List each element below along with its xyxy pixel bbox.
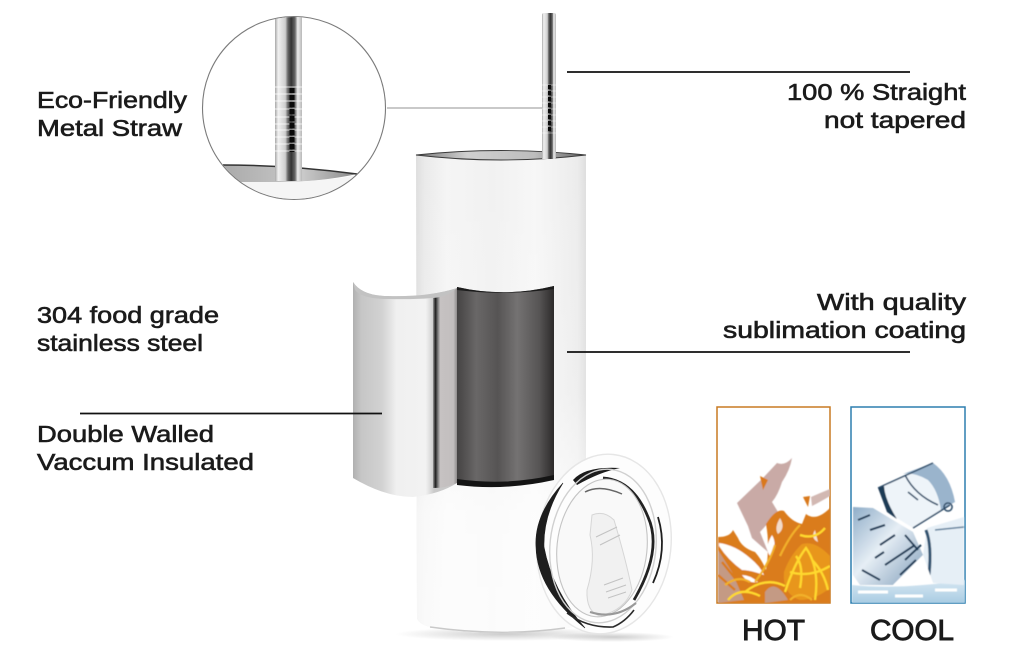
hot panel: [717, 407, 830, 603]
peeled wall flap: [353, 282, 457, 497]
tumbler body: [395, 150, 615, 641]
flames illustration: [718, 458, 830, 603]
leader line: double wall: [80, 412, 382, 414]
metal straw: [542, 13, 556, 159]
label: straight straw: [787, 79, 967, 133]
tumbler rim: [416, 150, 586, 160]
clear lid: [528, 447, 680, 642]
label: COOL: COOL: [870, 615, 954, 647]
zoom circle: straw detail: [202, 15, 386, 205]
label: sublimation coating: [723, 289, 967, 343]
lid slider: [587, 513, 632, 616]
label: 304 food grade stainless steel: [37, 302, 219, 356]
label: double walled vacuum insulated: Vaccum Insulated: [37, 449, 254, 475]
label: sublimation coating: sublimation coating: [723, 317, 966, 343]
label: double walled vacuum insulated: [37, 421, 254, 475]
steel window cutaway: [457, 286, 554, 487]
cool panel: [851, 407, 965, 603]
label: eco-friendly metal straw: [37, 87, 188, 141]
label: sublimation coating: With quality: [817, 289, 967, 315]
label: 304 food grade stainless steel: 304 food grade: [37, 302, 219, 328]
ice cubes illustration: [852, 463, 965, 603]
label: HOT: HOT: [742, 615, 805, 647]
label: eco-friendly metal straw: Metal Straw: [37, 115, 182, 141]
label: eco-friendly metal straw: Eco-Friendly: [37, 87, 188, 113]
leader line: sublimation coating: [567, 351, 910, 353]
connector line from zoom circle to straw: [387, 107, 542, 109]
label: 304 food grade stainless steel: stainless steel: [37, 330, 203, 356]
label: straight straw: 100 % Straight: [787, 79, 967, 105]
leader line: straight straw: [567, 71, 910, 73]
label: double walled vacuum insulated: Double Walled: [37, 421, 214, 447]
label: straight straw: not tapered: [824, 107, 966, 133]
flap inner strip: [433, 288, 457, 488]
